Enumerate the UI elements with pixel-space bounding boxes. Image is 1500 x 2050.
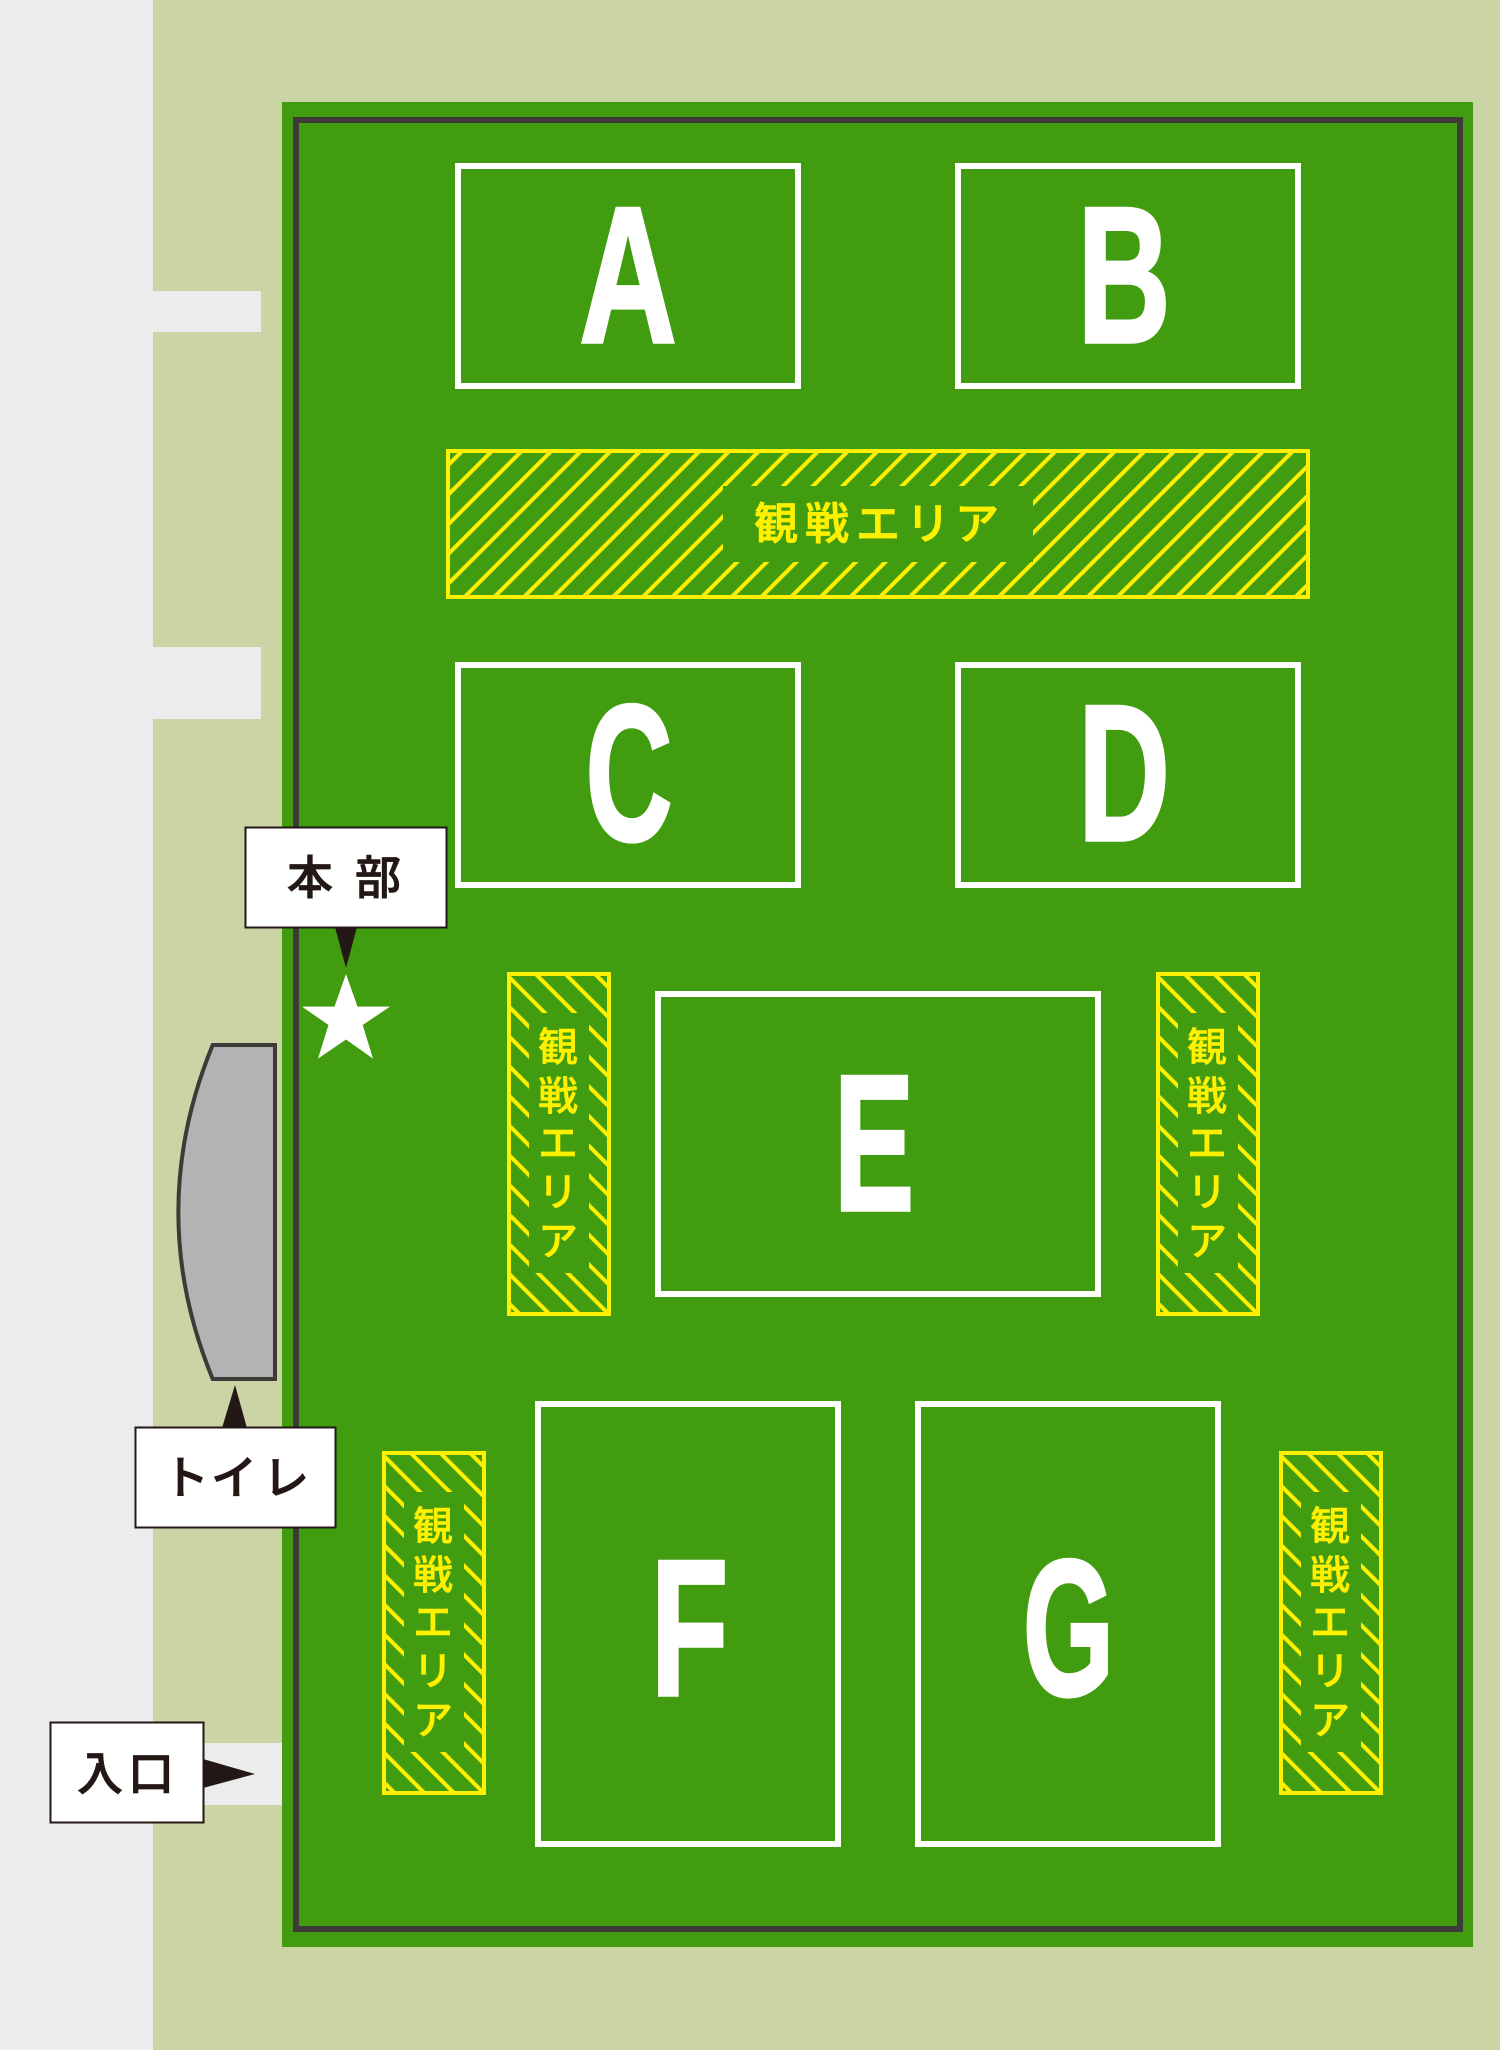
field [282, 102, 1473, 1947]
viewing area: horizontal band: リ [906, 500, 950, 549]
viewing area: right of E: リ [1187, 1171, 1227, 1215]
viewing area: left of F: ア [413, 1699, 453, 1743]
viewing area: right of G: リ [1310, 1650, 1350, 1694]
viewing area: left of E: リ [538, 1171, 578, 1215]
viewing area: right of G: エ [1310, 1601, 1350, 1645]
viewing area: right of E [1158, 974, 1258, 1314]
label: headquarters [246, 828, 446, 928]
court C [458, 665, 798, 885]
label: entrance: 入 [77, 1748, 123, 1800]
viewing area: left of F: 観 [413, 1505, 453, 1549]
viewing area: left of F [384, 1453, 484, 1793]
court G: G [1023, 1520, 1114, 1736]
label: entrance [50, 1722, 204, 1822]
viewing area: left of F: リ [413, 1650, 453, 1694]
path stub upper [153, 291, 261, 332]
court B: B [1077, 167, 1171, 383]
label: toilet: レ [263, 1452, 309, 1504]
icon: headquarters star [302, 974, 390, 1059]
viewing area: horizontal band: ア [955, 500, 999, 549]
label: entrance: 口 [128, 1748, 174, 1800]
viewing area: horizontal band: エ [856, 500, 900, 549]
court E [658, 994, 1098, 1294]
viewing area: right of G: 観 [1310, 1505, 1350, 1549]
court B [958, 166, 1298, 386]
court F: F [651, 1520, 728, 1736]
path stub middle [153, 647, 261, 719]
court E: E [834, 1036, 914, 1252]
viewing area: right of E: エ [1187, 1122, 1227, 1166]
viewing area: left of F: エ [413, 1601, 453, 1645]
entrance path [153, 1743, 282, 1805]
viewing area: horizontal band [448, 451, 1308, 597]
viewing area: left of E: 観 [538, 1026, 578, 1070]
field boundary line [296, 120, 1460, 1929]
viewing area: left of E [509, 974, 609, 1314]
toilet building [178, 1045, 275, 1379]
label: toilet: ト [163, 1452, 209, 1504]
label: toilet [136, 1428, 336, 1528]
label: toilet: イ [211, 1452, 257, 1504]
viewing area: left of F: 戦 [413, 1554, 453, 1598]
arrow: entrance pointer [203, 1759, 255, 1788]
court F [538, 1404, 838, 1844]
viewing area: horizontal band: 観 [754, 500, 798, 549]
viewing area: right of E: ア [1187, 1220, 1227, 1264]
viewing area: horizontal band: 戦 [805, 500, 849, 549]
court A [458, 166, 798, 386]
label: headquarters: 本 [287, 852, 333, 904]
viewing area: right of G [1281, 1453, 1381, 1793]
viewing area: left of E: ア [538, 1220, 578, 1264]
court D: D [1078, 665, 1170, 881]
viewing area: right of G: 戦 [1310, 1554, 1350, 1598]
court A: A [579, 168, 677, 384]
label: headquarters: 部 [355, 852, 401, 904]
court C: C [586, 666, 672, 882]
viewing area: left of E: エ [538, 1122, 578, 1166]
viewing area: right of G: ア [1310, 1699, 1350, 1743]
court G [918, 1404, 1218, 1844]
arrow: toilet pointer [222, 1385, 247, 1428]
viewing area: right of E: 観 [1187, 1026, 1227, 1070]
viewing area: left of E: 戦 [538, 1075, 578, 1119]
viewing area: right of E: 戦 [1187, 1075, 1227, 1119]
arrow: headquarters pointer [335, 927, 357, 968]
court D [958, 665, 1298, 885]
